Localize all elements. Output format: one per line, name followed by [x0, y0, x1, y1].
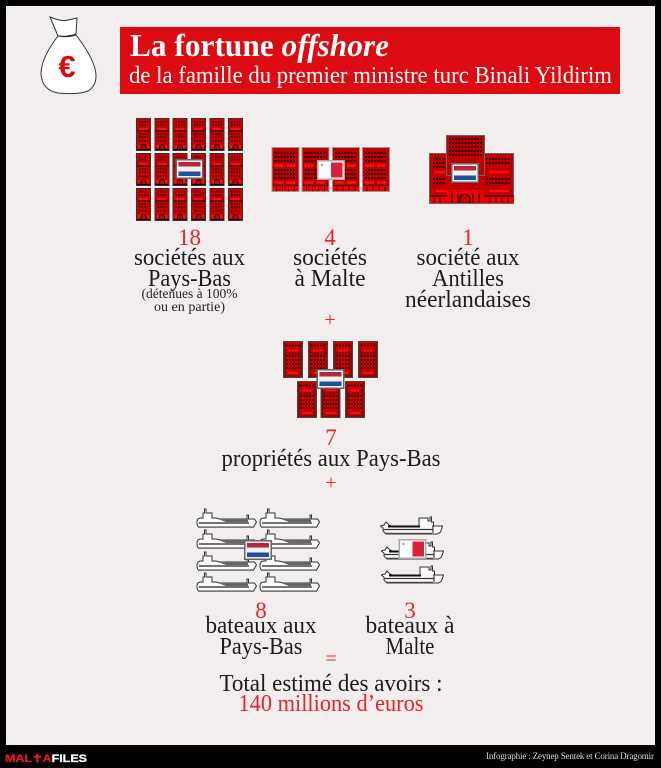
- title banner: de la famille du premier ministre turc Binali Yildirim: [129, 63, 612, 89]
- total: [220, 671, 442, 717]
- label: 18 companies in the Netherlands: [134, 225, 245, 315]
- icon group: 3 boats in Malta: [380, 517, 444, 583]
- label: 4 companies in Malta: sociétés: [293, 245, 367, 271]
- label: 18 companies in the Netherlands: 18: [178, 225, 201, 250]
- label: 7 properties in the Netherlands: [222, 425, 440, 472]
- label: 1 company in the Netherlands Antilles: 1: [462, 225, 474, 250]
- title banner: La fortune offshore: [130, 27, 389, 63]
- logo: Malta Files: MAL✝A FILES: [5, 753, 87, 765]
- icon grid: 18 Dutch companies: [136, 118, 242, 220]
- label: 1 company in the Netherlands Antilles: société aux: [416, 245, 520, 271]
- label: 8 boats in the Netherlands: [206, 598, 316, 660]
- plus sign: +: [325, 472, 337, 494]
- label: 3 boats in Malta: 3: [404, 598, 416, 623]
- label: 18 companies in the Netherlands: ou en partie): [154, 300, 225, 315]
- label: 1 company in the Netherlands Antilles: néerlandaises: [405, 287, 531, 313]
- icon group: 8 boats in the Netherlands: [197, 509, 320, 591]
- equals sign: =: [325, 648, 337, 670]
- label: 1 company in the Netherlands Antilles: Antilles: [432, 266, 504, 292]
- label: 18 companies in the Netherlands: sociétés aux: [134, 245, 245, 271]
- icon: money bag: €: [58, 49, 76, 84]
- label: 3 boats in Malta: [366, 598, 455, 660]
- total: 140 millions d’euros: [238, 691, 424, 717]
- credit: Infographie : Zeynep Sentek et Corina Dragomir: [486, 751, 654, 761]
- total: Total estimé des avoirs :: [220, 671, 442, 697]
- title banner: [120, 27, 620, 94]
- icon row: 4 Maltese companies: [272, 148, 390, 192]
- label: 3 boats in Malta: bateaux à: [366, 613, 455, 639]
- plus sign: +: [324, 309, 336, 331]
- label: 1 company in the Netherlands Antilles: [405, 225, 531, 313]
- label: 18 companies in the Netherlands: (détenues à 100%: [142, 287, 238, 302]
- label: 4 companies in Malta: 4: [324, 225, 336, 250]
- label: 8 boats in the Netherlands: 8: [255, 598, 267, 623]
- label: 3 boats in Malta: Malte: [386, 634, 434, 660]
- label: 7 properties in the Netherlands: 7: [325, 425, 337, 450]
- label: 18 companies in the Netherlands: Pays-Bas: [148, 266, 231, 292]
- label: 8 boats in the Netherlands: bateaux aux: [206, 613, 316, 639]
- label: 8 boats in the Netherlands: Pays-Bas: [220, 634, 302, 660]
- icon: money bag: [41, 17, 96, 94]
- icon group: 7 properties: [284, 342, 378, 418]
- label: 4 companies in Malta: à Malte: [294, 266, 366, 292]
- label: 7 properties in the Netherlands: propriétés aux Pays-Bas: [222, 446, 440, 472]
- label: 4 companies in Malta: [293, 225, 367, 292]
- icon: large building, Netherlands Antilles: [430, 136, 514, 204]
